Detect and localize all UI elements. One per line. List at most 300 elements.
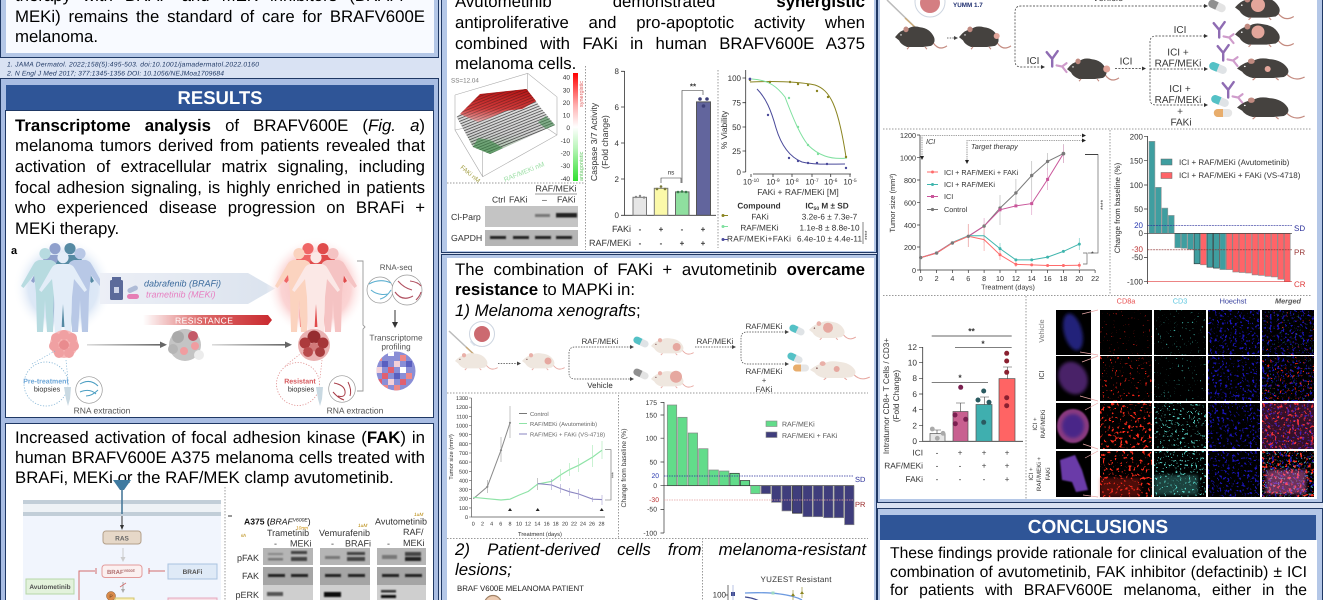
figure: western blots A375: - (274, 538, 277, 548)
chart: caspase 3/7 activity (589, 67, 716, 248)
chart: caspase 3/7 activity: 4 (615, 139, 620, 148)
chart: viability dose-response: 10 (766, 178, 775, 186)
chart: xenograft waterfall: -30 (649, 497, 659, 504)
chart: xenograft tumor size: 900 (459, 433, 468, 439)
chart: syngeneic waterfall: 150 (1130, 156, 1144, 166)
figure: immunofluorescence grid (1028, 296, 1314, 497)
legend: xenograft series: RAF/MEKi (Avutometinib) (530, 421, 597, 428)
chart: intratumor CD8+ T cells: + (1005, 448, 1010, 458)
chart: caspase 3/7 activity: 0 (615, 211, 620, 220)
chart: xenograft tumor size: 28 (598, 522, 604, 528)
text: transcriptome analysis: focal adhesion signaling, is highly enriched in patients (15, 178, 425, 197)
text: overcome resistance: The combination of FAKi + avutometinib overcame (455, 260, 865, 278)
panel: FAK box (5, 423, 434, 600)
chart: syngeneic tumor size: 14 (1028, 274, 1036, 283)
chart: xenograft tumor size: 300 (459, 488, 468, 494)
icon: resistant tumor (298, 329, 330, 361)
icon: mid-treatment tumor (168, 329, 204, 361)
chart: intratumor CD8+ T cells: - (959, 474, 962, 484)
panel: immune models white area (880, 0, 1317, 499)
arrow: BRAF to MEK (120, 582, 126, 593)
chart: syngeneic tumor size: 400 (904, 221, 916, 230)
chart: intratumor CD8+ T cells: 2 (912, 420, 917, 430)
chart: xenograft tumor size: 1200 (456, 405, 468, 411)
chart: xenograft tumor size: 6 (499, 522, 502, 528)
text: synergy: antiproliferative and pro-apoptotic activity when (455, 13, 865, 32)
chart: viability dose-response: -7 (814, 178, 819, 184)
figure: cleaved PARP blot: Ctrl (492, 194, 505, 204)
chart: caspase 3/7 activity: (Fold change) (600, 115, 610, 169)
legend: synergy colour bar: -40 (561, 176, 570, 183)
chart: xenograft tumor size: 0 (465, 515, 468, 521)
chart: viability dose-response: 50 (732, 123, 742, 132)
chart: syngeneic tumor size: 4 (950, 274, 954, 283)
figure: western blots A375: RAF/ (403, 527, 424, 537)
chart: caspase 3/7 activity: + (680, 239, 685, 248)
chart: viability dose-response: 10 (843, 178, 852, 186)
chart: syngeneic waterfall: -50 (1131, 253, 1144, 262)
box: BRAF V600E: BRAF (107, 570, 124, 576)
chart: syngeneic tumor size: 1000 (900, 154, 916, 162)
blot: FAK row (263, 567, 426, 585)
chart: syngeneic waterfall: SD (1294, 224, 1305, 233)
chart: intratumor CD8+ T cells: (Fold Change) (892, 370, 901, 422)
chart: xenograft tumor size: 22 (571, 522, 577, 528)
text: conclusions: combination of avutometinib, FAK inhibitor (defactinib) ± ICI (890, 564, 1307, 581)
callout: pre-treatment biopsies: biopsies (34, 384, 61, 394)
chart: xenograft waterfall: 100 (646, 436, 657, 442)
legend: syngeneic series: ICI + RAF/MEKi (944, 180, 995, 189)
chart: xenograft waterfall: 50 (649, 460, 657, 466)
legend: synergy colour bar: 10 (563, 112, 570, 120)
chart: xenograft tumor size: 600 (459, 460, 468, 466)
chart: xenograft tumor size: 1000 (456, 424, 468, 430)
chart: YUZEST resistant (713, 575, 832, 600)
text: FAK activation: Increased activation of focal adhesion kinase (FAK) in (15, 428, 425, 447)
legend: syngeneic series: Control (944, 205, 968, 214)
legend: synergy colour bar: -10 (561, 138, 570, 145)
chart: syngeneic tumor size: 2 (935, 274, 939, 283)
chart: syngeneic tumor size: Treatment (days) (981, 284, 1035, 292)
legend: synergy colour bar: 30 (563, 88, 570, 94)
chart: intratumor CD8+ T cells: Intratumor CD8+ T Cells / CD3+ (882, 338, 891, 454)
images: CD3 channel (1154, 310, 1206, 497)
panel: background (0, 0, 439, 58)
legend: syngeneic waterfall (1161, 158, 1301, 180)
box: avutometinib (26, 568, 96, 600)
labels: rows (1028, 319, 1052, 491)
figure: western blots A375: BRAFi (345, 538, 371, 548)
chart: xenograft waterfall: Change from baseline (%) (621, 429, 628, 507)
chart: syngeneic tumor size: Tumor size (mm³) (888, 173, 897, 232)
diagram: melanoma xenograft schedule (449, 321, 870, 394)
figure: western blots A375 (228, 512, 427, 600)
text: transcriptome analysis: MEKi therapy. (15, 219, 119, 238)
text: background paragraph: MEKi) remains the standard of care for BRAFV600E (15, 7, 425, 26)
headers: channels: Merged (1275, 296, 1302, 306)
chart: viability dose-response: 10 (824, 178, 833, 186)
chart: syngeneic waterfall: 20 (1134, 221, 1144, 230)
table: IC50 values (722, 202, 871, 244)
chart: xenograft waterfall: -50 (647, 506, 657, 514)
figure: western blots A375: V600E (293, 518, 308, 524)
figure: cleaved PARP blot: FAKi (557, 194, 576, 204)
figure: western blots A375: Vemurafenib (319, 528, 370, 538)
heading: results (6, 85, 434, 110)
diagram: melanoma xenograft schedule: + (762, 376, 767, 385)
diagram: melanoma xenograft schedule: RAF/MEKi (697, 337, 734, 346)
legend: synergy colour bar: 0 (566, 125, 570, 132)
chart: viability dose-response: -5 (852, 178, 857, 184)
panel: immune models (877, 0, 1323, 503)
chart: syngeneic tumor size: 8 (982, 274, 986, 283)
text: transcriptome profiling: profiling (381, 342, 411, 352)
chart: caspase 3/7 activity: 6 (615, 103, 620, 112)
icon: resistant patients (266, 237, 366, 337)
figure: western blots A375: 10nm (296, 526, 308, 532)
figure: western blots A375: 1uM (414, 512, 423, 518)
chart: xenograft tumor size: 1300 (456, 396, 468, 402)
panel: conclusions white area (880, 540, 1317, 600)
figure: western blots A375: Trametinib (267, 528, 309, 538)
diagram: syngeneic immune model schedule: ICI (1027, 56, 1039, 67)
text: FAK activation: human BRAFV600E A375 melanoma cells treated with (15, 448, 425, 467)
chart: xenograft waterfall: 175 (646, 400, 657, 407)
chart: intratumor CD8+ T cells (882, 326, 1023, 484)
images: merged channel (1262, 310, 1314, 497)
chart: xenograft tumor size: 24 (580, 522, 586, 528)
heading: conclusions: CONCLUSIONS (1028, 517, 1168, 538)
legend: synergy colour bar: antagonistic (579, 151, 585, 181)
table: IC50 values: IC (805, 202, 814, 210)
legend: xenograft series: RAF/MEKi + FAKi (VS-4718) (530, 432, 605, 438)
chart: intratumor CD8+ T cells: RAF/MEKi (884, 460, 923, 470)
legend: xenograft series: Control (530, 411, 549, 418)
chart: xenograft tumor size: 12 (525, 522, 531, 528)
chart: xenograft tumor size: 800 (459, 442, 468, 448)
panel: synergy white area (447, 0, 874, 251)
chart: 3D synergy surface: RAF/MEKi nM (503, 161, 546, 184)
chart: caspase 3/7 activity: ** (690, 82, 697, 91)
labels: rows: Vehicle (1037, 319, 1046, 343)
chart: YUZEST resistant: YUZEST Resistant (760, 575, 832, 584)
figure a: transcriptome schematic: a (11, 245, 18, 257)
labels: rows: ICI + (1028, 467, 1035, 481)
labels: rows: FAKi (1045, 467, 1052, 481)
chart: 3D synergy surface: FAKi nM (459, 164, 481, 185)
arrow: resistance: RESISTANCE (175, 315, 233, 325)
references (6, 62, 259, 78)
blot: pERK row (263, 585, 426, 600)
chart: xenograft tumor size: 16 (544, 522, 550, 528)
figure: cleaved PARP blot (451, 184, 578, 246)
chart: intratumor CD8+ T cells: ICI (912, 448, 923, 458)
legend: syngeneic series: ICI (944, 192, 953, 201)
text: synergy (455, 0, 865, 73)
text: overcome resistance: resistance to MAPKi in: (455, 280, 635, 299)
chart: syngeneic waterfall: Change from baseline (%) (1113, 162, 1122, 253)
chart: intratumor CD8+ T cells: - (936, 448, 939, 458)
figure: cleaved PARP blot: – (542, 194, 547, 204)
diagram: melanoma xenograft schedule: Vehicle (587, 381, 613, 390)
text: FAK activation (15, 428, 425, 487)
chart: xenograft tumor size: 10 (516, 522, 522, 528)
chart: intratumor CD8+ T cells: + (1005, 460, 1010, 470)
text: transcriptome analysis: melanoma tumors derived from patients revealed that (15, 136, 425, 155)
chart: viability dose-response: -6 (833, 178, 838, 184)
text: transcriptome analysis: Transcriptome analysis of BRAFV600E (Fig. a) (15, 116, 425, 134)
legend: xenograft waterfall: RAF/MEKi + FAKi (782, 432, 838, 440)
chart: xenograft tumor size: Treatment (days) (518, 531, 562, 538)
text: overcome resistance (455, 260, 865, 320)
chart: viability dose-response: 100 (728, 74, 742, 83)
legend: xenograft waterfall (766, 420, 838, 440)
diagram: melanoma xenograft schedule: RAF/MEKi (582, 337, 619, 346)
callout: pre-treatment biopsies (23, 351, 131, 416)
text: overcome resistance: 1) Melanoma xenografts; (455, 301, 641, 320)
chart: viability dose-response: % Viability (719, 110, 729, 149)
lines: zoom connectors (1080, 310, 1098, 497)
chart: xenograft tumor size: 4 (490, 522, 493, 528)
table: IC50 values: FAKi (751, 212, 769, 222)
heading: conclusions (880, 515, 1316, 540)
chart: syngeneic tumor size: 1200 (900, 131, 916, 140)
table: IC50 values: 50 (814, 206, 819, 212)
chart: xenograft tumor size: 500 (459, 469, 468, 475)
arrow: resistance (143, 315, 272, 325)
text: background paragraph: melanoma. (15, 27, 98, 46)
chart: syngeneic waterfall (1113, 132, 1306, 289)
diagram: syngeneic immune model schedule (887, 0, 1305, 128)
chart: intratumor CD8+ T cells: + (958, 448, 963, 458)
chart: intratumor CD8+ T cells: + (1005, 474, 1010, 484)
diagram: melanoma xenograft schedule: RAF/MEKi (746, 322, 783, 331)
chart: syngeneic waterfall: -30 (1131, 245, 1144, 254)
chart: syngeneic tumor size: 22 (1091, 274, 1099, 283)
figure: western blots A375: A375 (BRAF (244, 516, 293, 526)
panel: overcoming resistance (441, 254, 877, 600)
box: avutometinib: Avutometinib (29, 584, 71, 591)
bracket (357, 261, 365, 391)
legend: syngeneic waterfall: ICI + RAF/MEKi + FAKi (VS-4718) (1179, 171, 1301, 180)
chart: intratumor CD8+ T cells: + (982, 460, 987, 470)
diagram: syngeneic immune model schedule: YUMM 1.7 (953, 2, 983, 9)
references: 2. N Engl J Med 2017; 377:1345-1356 DOI: 10.1056/NEJMoa1709684 (6, 70, 224, 78)
chart: intratumor CD8+ T cells: 4 (912, 404, 917, 414)
legend: xenograft series (519, 411, 605, 438)
chart: syngeneic waterfall: -100 (1127, 278, 1144, 286)
text: background paragraph (15, 0, 425, 46)
chart: viability dose-response: 25 (732, 147, 742, 156)
heading: results: RESULTS (178, 87, 262, 108)
chart: viability dose-response: 10 (805, 178, 814, 186)
chart: syngeneic waterfall: 0 (1139, 229, 1144, 238)
chart: YUZEST resistant: 100 (713, 590, 727, 600)
chart: intratumor CD8+ T cells: - (936, 460, 939, 470)
chart: xenograft tumor size: 700 (459, 451, 468, 457)
headers: channels: CD8a (1117, 296, 1136, 306)
chart: xenograft tumor size: 1100 (456, 414, 468, 420)
chart: intratumor CD8+ T cells: ** (968, 326, 975, 336)
chart: xenograft tumor size: 200 (459, 497, 468, 503)
text: transcriptome analysis: who experienced disease progression on BRAFi + (15, 198, 425, 217)
icon: phospho group (106, 592, 217, 600)
diagram: syngeneic immune model schedule: FAKi (1170, 118, 1192, 128)
text: patient label: BRAF V600E MELANOMA PATIENT (457, 584, 584, 593)
chart: xenograft tumor size: 100 (459, 506, 468, 512)
text: conclusions (890, 545, 1307, 599)
chart: syngeneic waterfall: CR (1294, 280, 1306, 289)
panel: conclusions (877, 508, 1323, 600)
labels: rows: RAF/MEKi + (1036, 457, 1043, 491)
legend: synergy colour bar: -20 (561, 150, 570, 158)
images: whole-tumor thumbnails (1052, 310, 1094, 497)
chart: intratumor CD8+ T cells: 6 (912, 389, 917, 399)
chart: viability dose-response: -10 (752, 178, 759, 184)
callout: resistant biopsies: biopsies (288, 384, 315, 394)
callout: pre-treatment biopsies: RNA extraction (74, 406, 131, 416)
chart: syngeneic waterfall: PR (1294, 248, 1305, 257)
icon: patient head (484, 596, 502, 600)
chart: intratumor CD8+ T cells: 8 (912, 373, 917, 383)
chart: viability dose-response: 75 (732, 98, 742, 108)
figure: western blots A375: pERK (235, 590, 259, 600)
chart: syngeneic tumor size: 18 (1059, 274, 1067, 283)
arrow: tumor progression 1 (87, 342, 167, 348)
diagram: syngeneic immune model schedule: + (1177, 106, 1183, 118)
chart: syngeneic tumor size: 0 (912, 266, 916, 275)
chart: viability dose-response: 10 (743, 178, 752, 186)
chart: xenograft waterfall (621, 400, 866, 538)
table: IC50 values: RAF/MEKi (740, 224, 779, 232)
arrow: therapy (100, 273, 275, 304)
icon: phospho group: P (109, 594, 113, 600)
text: conclusions: These findings provide rationale for clinical evaluation of the (890, 545, 1307, 562)
chart: intratumor CD8+ T cells: * (981, 338, 985, 348)
chart: xenograft tumor size: 0 (472, 522, 475, 528)
icon: receptor (113, 480, 131, 514)
figure: western blots A375: FAK (242, 571, 259, 581)
table: IC50 values: M ± SD (819, 202, 849, 210)
figure: western blots A375: MEKi (290, 538, 312, 548)
chart: intratumor CD8+ T cells: * (958, 372, 962, 382)
text: synergy: melanoma cells. (455, 54, 576, 73)
figure: MAPK pathway diagram (23, 480, 221, 600)
arrow: receptor to RAS (120, 516, 124, 530)
chart: syngeneic waterfall: 200 (1130, 132, 1144, 142)
text: transcriptome profiling (369, 332, 423, 352)
table: IC50 values: 6.4e-10 ± 4.4e-11 (797, 234, 862, 244)
legend: synergy colour bar: 20 (563, 100, 570, 107)
table: IC50 values: 3.2e-6 ± 7.3e-7 (802, 212, 858, 222)
chart: caspase 3/7 activity: FAKi (612, 224, 631, 234)
box: BRAFi (149, 564, 217, 579)
chart: syngeneic tumor size: 6 (966, 274, 970, 283)
text: RNA-seq: RNA-seq (380, 263, 412, 272)
chart: 3D synergy surface (451, 73, 585, 185)
figure: western blots A375: ) (308, 516, 311, 526)
labels: rows: ICI (1037, 370, 1046, 380)
figure: western blots A375: Avutometinib (375, 516, 427, 526)
chart: caspase 3/7 activity: - (660, 239, 663, 248)
chart: caspase 3/7 activity: + (701, 225, 706, 234)
chart: caspase 3/7 activity: 8 (615, 67, 620, 76)
callout: pre-treatment biopsies: Pre-treatment (23, 378, 69, 386)
callout: resistant biopsies: Resistant (284, 378, 316, 386)
diagram: syngeneic immune model schedule: ICI (1120, 56, 1132, 68)
legend: syngeneic series (927, 168, 1019, 214)
table: IC50 values: Compound (737, 202, 781, 210)
chart: syngeneic tumor size: 10 (996, 274, 1004, 283)
box: RAS: RAS (115, 535, 130, 542)
chart: xenograft tumor size: 26 (589, 522, 595, 528)
chart: viability dose-response: FAKi + RAF/MEKi [M] (757, 187, 839, 197)
diagram: syngeneic immune model schedule: ICI + (1169, 84, 1191, 95)
headers: channels: CD3 (1173, 296, 1187, 306)
chart: xenograft tumor size: Tumor size (mm³) (448, 434, 455, 480)
chart: caspase 3/7 activity: - (639, 239, 642, 248)
chart: intratumor CD8+ T cells: - (983, 474, 986, 484)
table: IC50 values: **** (864, 230, 871, 240)
table: IC50 values: RAF/MEKi+FAKi (727, 234, 791, 244)
chart: xenograft tumor size: 14 (534, 522, 540, 528)
legend: xenograft waterfall: RAF/MEKi (782, 420, 815, 428)
chart: intratumor CD8+ T cells: 10 (908, 358, 917, 368)
text: transcriptome profiling: Transcriptome (369, 332, 423, 342)
chart: xenograft waterfall: SD (855, 475, 866, 484)
chart: syngeneic tumor size: 12 (1012, 274, 1020, 283)
panel: synergy (441, 0, 877, 253)
chart: syngeneic tumor size: 200 (904, 243, 916, 252)
chart: xenograft tumor size: 18 (553, 522, 559, 528)
chart: caspase 3/7 activity: + (659, 225, 664, 234)
chart: syngeneic tumor size: 20 (1075, 274, 1083, 283)
chart: syngeneic tumor size: 0 (919, 274, 923, 283)
chart: intratumor CD8+ T cells: 12 (908, 342, 917, 352)
icon: sensitive patients (13, 237, 113, 337)
chart: xenograft tumor size: *** (611, 472, 617, 478)
figure: western blots A375: MEKi (403, 538, 425, 548)
chart: caspase 3/7 activity: - (639, 225, 642, 234)
chart: intratumor CD8+ T cells: - (936, 474, 939, 484)
chart: viability dose-response: 10 (785, 178, 794, 186)
table: IC50 values: 1.1e-8 ± 8.8e-10 (799, 224, 860, 232)
figure: western blots A375: pFAK (237, 553, 259, 563)
chart: viability dose-response: -9 (775, 178, 780, 184)
icon: heatmap (376, 351, 416, 391)
icon: pre-treatment tumor (49, 330, 79, 358)
diagram: syngeneic immune model schedule: ICI (1174, 25, 1186, 36)
legend: synergy colour bar: -30 (561, 163, 570, 170)
panel: transcriptome box (5, 110, 434, 418)
arrow: RAS to BRAF (120, 548, 126, 562)
legend: syngeneic waterfall: ICI + RAF/MEKi (Avutometinib) (1179, 158, 1290, 167)
chart: xenograft tumor size (448, 396, 617, 538)
chart: xenograft tumor size: 400 (459, 478, 468, 484)
labels: rows: ICI + (1032, 417, 1039, 431)
chart: intratumor CD8+ T cells: 0 (912, 436, 917, 446)
box: BRAF V600E (102, 565, 142, 578)
chart: xenograft tumor size: 8 (508, 522, 512, 528)
chart: caspase 3/7 activity: + (701, 239, 706, 248)
chart: xenograft waterfall: 150 (646, 412, 657, 420)
chart: caspase 3/7 activity: RAF/MEKi (589, 238, 631, 248)
references: 1. JAMA Dermatol. 2022;158(5):495-503. doi:10.1001/jamadermatol.2022.0160 (7, 62, 259, 68)
callout: resistant biopsies: RNA extraction (327, 406, 384, 416)
chart: syngeneic tumor size: ICI (926, 137, 935, 146)
chart: viability dose-response (719, 70, 871, 244)
figure: western blots A375: 1uM (358, 523, 367, 529)
